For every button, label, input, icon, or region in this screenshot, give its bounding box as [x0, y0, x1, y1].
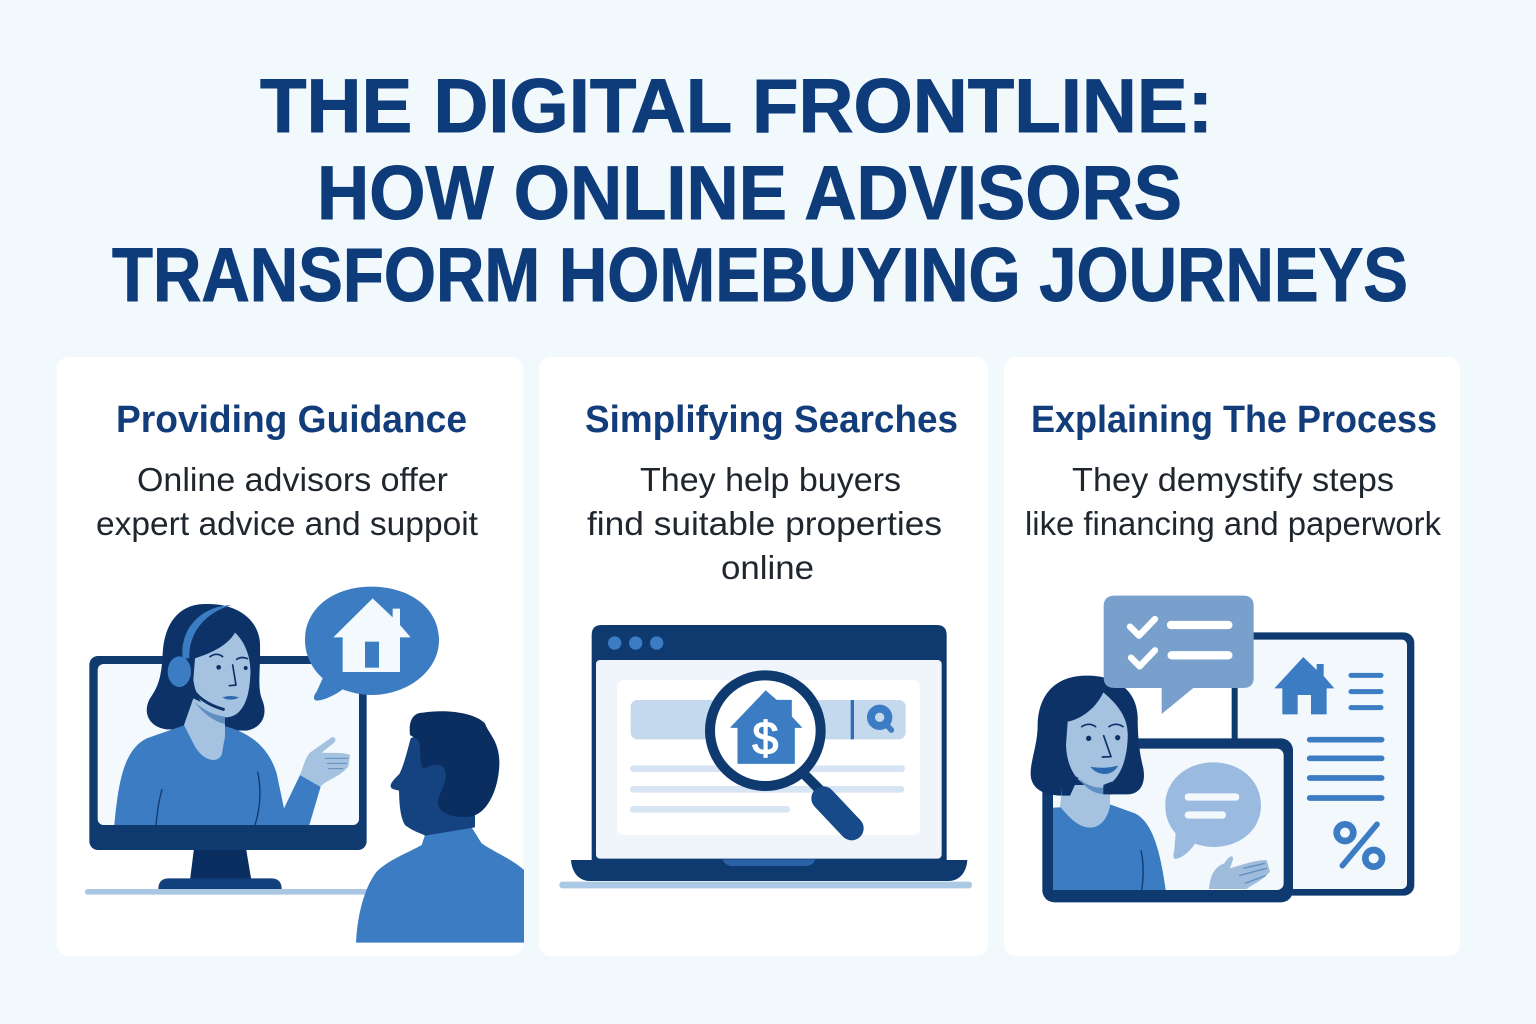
panel: explaining the process [1004, 357, 1460, 956]
illustration: advisor explaining documents [1031, 596, 1414, 902]
heading: providing guidance: Providing Guidance [116, 399, 467, 441]
panel: providing guidance [57, 357, 524, 956]
text: simplifying searches description: online [721, 549, 814, 586]
panel: simplifying searches [539, 357, 988, 956]
heading: simplifying searches: Simplifying Searches [585, 399, 958, 441]
title: HOW ONLINE ADVISORS [317, 151, 1182, 236]
speech bubble with checklist [1104, 596, 1254, 714]
text: simplifying searches description: They help buyers [640, 461, 901, 498]
tablet screen [1042, 738, 1293, 902]
illustration: video call with advisor [85, 587, 524, 943]
illustration: laptop property search [559, 625, 972, 888]
heading: explaining the process: Explaining The Process [1031, 399, 1437, 441]
text: providing guidance description: expert advice and suppoit [96, 505, 478, 542]
text: simplifying searches description: find suitable properties [587, 505, 942, 542]
document with house and percent [1232, 632, 1414, 896]
title [112, 64, 1408, 318]
icon: magnifying glass with house [710, 675, 852, 828]
figure: advisor woman [1031, 676, 1166, 890]
text: providing guidance description: Online advisors offer [137, 461, 448, 498]
icon: speech bubble with house [305, 587, 439, 701]
icon: magnifying glass with house: $ [752, 712, 778, 764]
text: explaining the process description: They demystify steps [1072, 461, 1394, 498]
text: simplifying searches description [587, 461, 942, 586]
text: explaining the process description: like financing and paperwork [1025, 505, 1441, 542]
title: THE DIGITAL FRONTLINE: [260, 64, 1213, 149]
text: explaining the process description [1025, 461, 1441, 542]
figure: man viewing screen [356, 711, 524, 943]
text: providing guidance description [96, 461, 478, 542]
search bar [631, 700, 906, 739]
